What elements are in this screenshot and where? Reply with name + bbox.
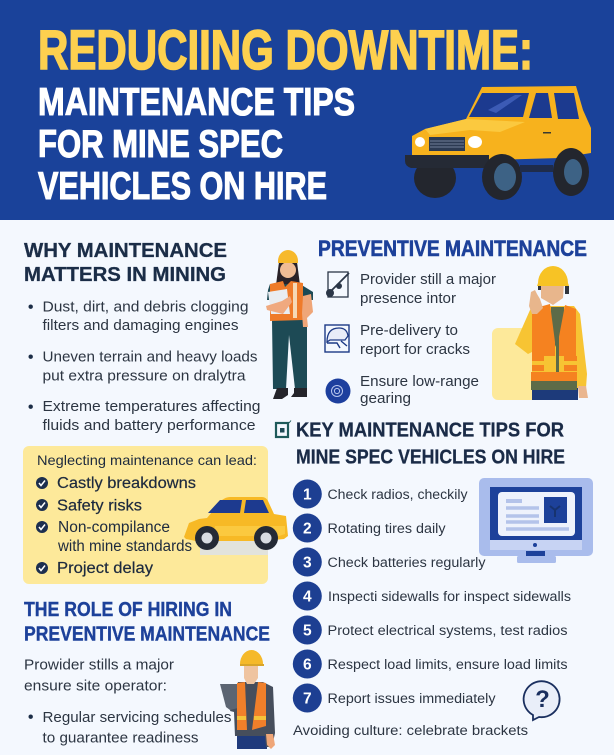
- badge numbers: 3: [303, 554, 312, 572]
- bullet list: causes: Dust, dirt, and debris clogging: [42, 298, 248, 316]
- text: preventive items: Provider still a major: [360, 271, 496, 288]
- heading: why maintenance matters in mining: [24, 239, 227, 286]
- heading: the role of hiring: PREVENTIVE MAINTENANCE: [24, 622, 270, 646]
- tips list: Check batteries regularly: [328, 555, 486, 571]
- bullet: [28, 709, 232, 746]
- consequences list: Castly breakdowns: [57, 475, 196, 492]
- heading: the role of hiring: THE ROLE OF HIRING IN: [24, 598, 232, 621]
- heading: why maintenance matters in mining: WHY MAINTENANCE: [24, 239, 227, 262]
- badge numbers: 2: [303, 520, 312, 538]
- footer note: Avoiding culture: celebrate brackets: [293, 723, 528, 739]
- bullet: Regular servicing schedules: [42, 709, 232, 726]
- tips list: [328, 487, 571, 707]
- numbered badges: [293, 480, 322, 712]
- text: preventive items: presence intor: [360, 290, 456, 307]
- consequences list: Project delay: [57, 560, 153, 577]
- badge numbers: 6: [303, 656, 312, 674]
- heading: why maintenance matters in mining: MATTERS IN MINING: [24, 263, 226, 286]
- panel: neglect callout: [23, 446, 288, 584]
- subtitle: VEHICLES ON HIRE: [38, 165, 327, 208]
- bullet list: causes: fluids and battery performance: [42, 417, 256, 434]
- text: preventive items: gearing: [360, 390, 411, 407]
- text: preventive items: [360, 271, 496, 407]
- bullet: to guarantee readiness: [42, 730, 198, 746]
- badge numbers: [303, 486, 312, 708]
- callout intro: Neglecting maintenance can lead:: [37, 452, 257, 468]
- panel: role of hiring: [24, 598, 270, 746]
- tips list: Inspecti sidewalls for inspect sidewalls: [328, 589, 571, 605]
- heading: key maintenance tips: MINE SPEC VEHICLES ON HIRE: [296, 446, 565, 468]
- heading: key maintenance tips: [296, 418, 565, 468]
- panel: preventive maintenance: [318, 236, 587, 407]
- bullet list: causes: Extreme temperatures affecting: [42, 398, 260, 415]
- paragraph: [24, 656, 174, 694]
- subtitle: FOR MINE SPEC: [38, 123, 283, 166]
- heading: key maintenance tips: KEY MAINTENANCE TIPS FOR: [296, 418, 564, 442]
- icon: question bubble: ?: [535, 686, 550, 713]
- tips list: Report issues immediately: [328, 691, 496, 707]
- consequences list: Safety risks: [57, 498, 142, 514]
- illustration: man worker in safety vest: [492, 266, 588, 400]
- bullet list: causes: put extra pressure on dralytra: [42, 368, 246, 384]
- illustration: worker with tablet: [220, 650, 275, 749]
- check bullets: [36, 477, 48, 574]
- tips list: Respect load limits, ensure load limits: [328, 657, 568, 673]
- icon: inspection: [325, 325, 349, 352]
- icon: gear disc: [326, 378, 350, 404]
- consequences list: [57, 475, 196, 577]
- tips list: Rotating tires daily: [328, 521, 446, 537]
- illustration: woman worker with clipboard: [266, 250, 313, 399]
- badge numbers: 4: [303, 588, 312, 606]
- text: preventive items: report for cracks: [360, 341, 470, 358]
- paragraph: Prowider stills a major: [24, 656, 174, 674]
- bullet list: causes: Uneven terrain and heavy loads: [42, 348, 258, 366]
- consequences list: with mine standards: [57, 538, 192, 555]
- icon: question bubble: [524, 681, 560, 720]
- icon: yellow mine spec SUV: [405, 86, 591, 200]
- subtitle: [38, 81, 355, 208]
- subtitle: MAINTENANCE TIPS: [38, 81, 355, 124]
- tips list: Check radios, checkily: [328, 487, 468, 503]
- heading: the role of hiring: [24, 598, 270, 646]
- icon: wrench: [326, 272, 349, 297]
- badge numbers: 1: [303, 486, 312, 504]
- consequences list: Non-compilance: [58, 519, 170, 536]
- icon: yellow car: [184, 497, 288, 555]
- icon: monitor: [479, 478, 593, 563]
- paragraph: ensure site operator:: [24, 678, 167, 694]
- header banner: [0, 0, 614, 220]
- badge numbers: 7: [303, 690, 312, 708]
- panel: key maintenance tips: [276, 418, 593, 739]
- text: preventive items: Ensure low-range: [360, 373, 479, 390]
- bullet list: causes: filters and damaging engines: [42, 317, 238, 334]
- text: preventive items: Pre-delivery to: [360, 322, 458, 339]
- icon: checkbox: [276, 420, 291, 437]
- panel: why maintenance matters: [24, 239, 260, 434]
- badge numbers: 5: [303, 622, 312, 640]
- tips list: Protect electrical systems, test radios: [328, 623, 568, 639]
- bullet list: causes: [28, 298, 260, 434]
